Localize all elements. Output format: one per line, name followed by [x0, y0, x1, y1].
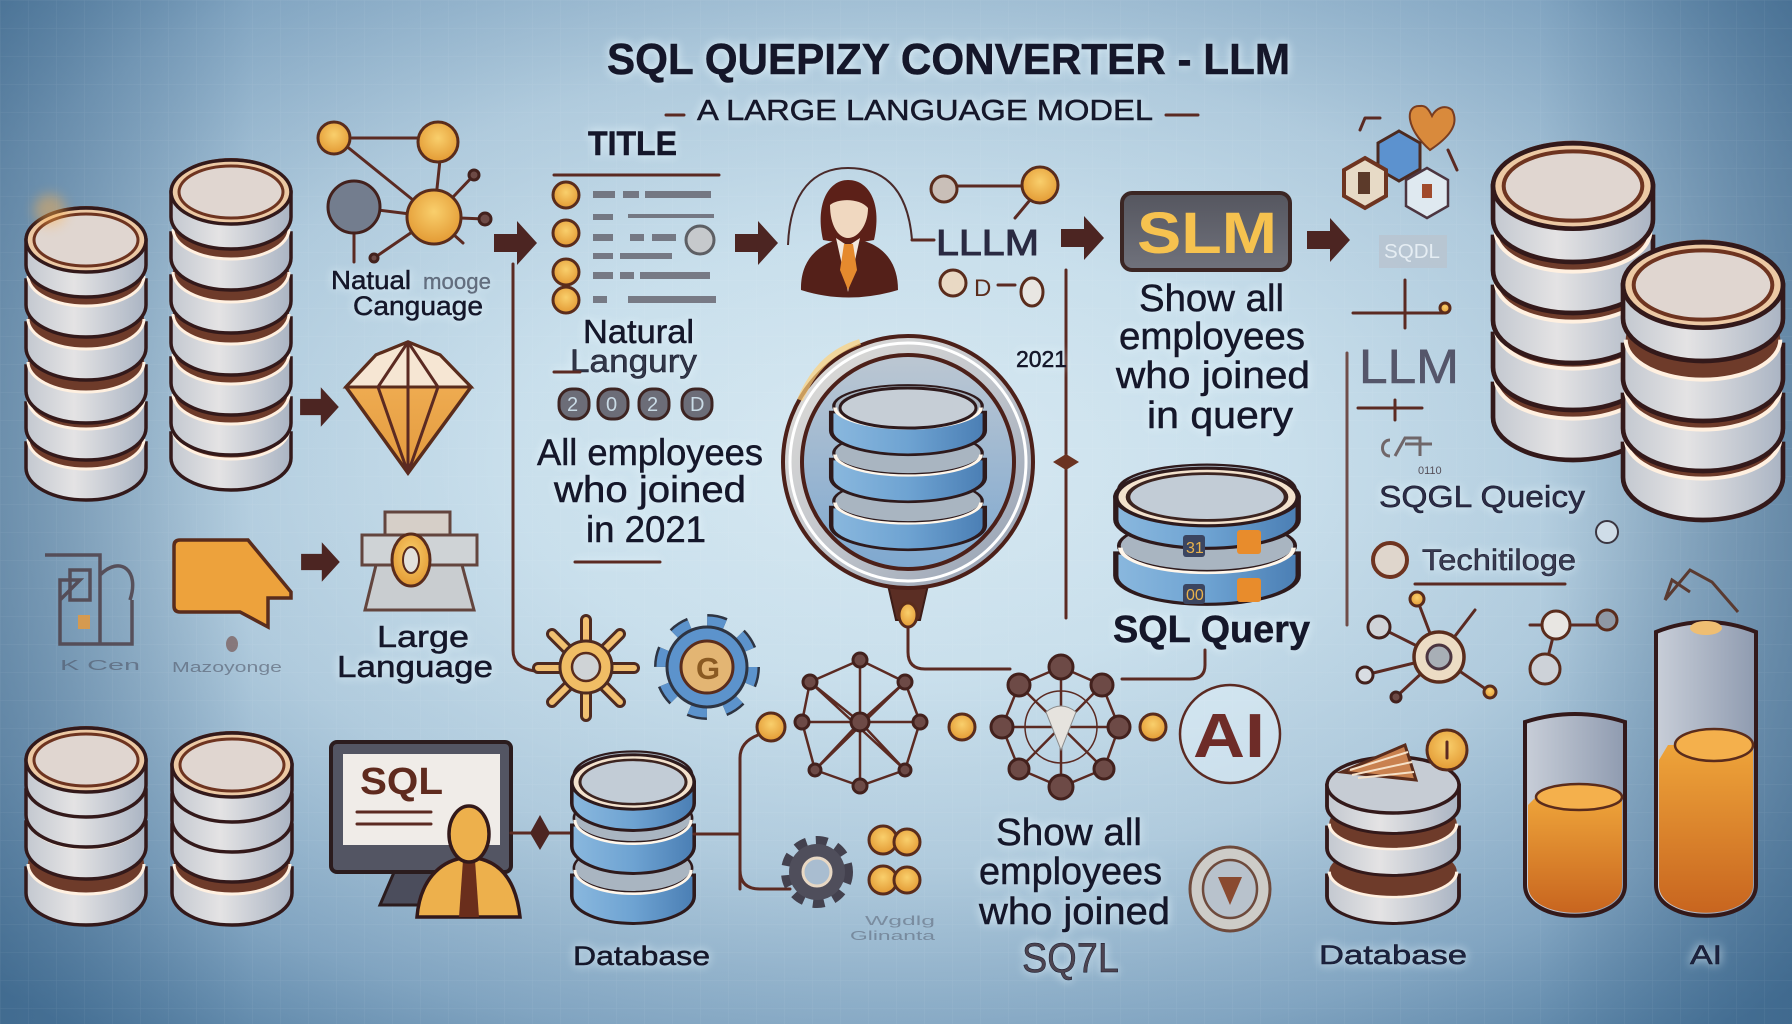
- year label: 2021: [1016, 346, 1067, 372]
- database stack bottom left 1: [26, 726, 146, 925]
- connector from SQL query: [1122, 650, 1205, 679]
- year pills: D: [690, 394, 704, 416]
- monitor with SQL: [331, 742, 511, 905]
- query text left: All employees: [537, 432, 763, 473]
- person orange: [417, 806, 520, 917]
- magnifier stack: [831, 385, 985, 550]
- database stack bottom left 2: [172, 731, 292, 925]
- natural language text: [554, 313, 697, 379]
- query text left: who joined: [553, 469, 746, 510]
- connector vertical right: [1346, 353, 1348, 625]
- connector vertical middle: [1053, 270, 1079, 618]
- query text left: in 2021: [586, 509, 706, 550]
- year pills: 2: [567, 394, 578, 416]
- faded caption bottom: [850, 913, 936, 943]
- faded SQL chip: [1379, 235, 1447, 268]
- SQL cylinder: 00: [1186, 587, 1204, 604]
- network icon top left: [318, 122, 491, 262]
- arrow to SLM: [1061, 216, 1104, 260]
- AI circle: [1180, 685, 1280, 783]
- icon row below LLLM: [940, 270, 1043, 306]
- natural language text: Langury: [570, 343, 697, 379]
- SQGL query label: SQGL Queicy: [1379, 479, 1586, 514]
- title: SQL QUEPIZY CONVERTER - LLM: [607, 35, 1290, 84]
- technology label: Techitiloge: [1422, 544, 1576, 577]
- faded caption bottom: Wgdlg: [865, 913, 935, 928]
- arrow after SLM: [1307, 218, 1350, 262]
- query text bottom: [978, 812, 1170, 981]
- arrow to list: [494, 221, 537, 265]
- icon: sun gear: [538, 620, 634, 716]
- LLM text right: LLM: [1359, 341, 1459, 394]
- label natural language: [331, 265, 491, 321]
- icon: diamond: [346, 342, 471, 473]
- database stack front right: [1623, 240, 1783, 520]
- label large language: Large: [377, 619, 469, 654]
- coins near gear: [869, 826, 920, 894]
- database stack second left: [171, 158, 291, 490]
- connector tree: [694, 735, 790, 889]
- title small: TITLE: [588, 125, 677, 163]
- label large language: [337, 619, 493, 684]
- database stack far right: [1493, 141, 1653, 460]
- natural language text: Natural: [583, 313, 694, 350]
- faded caption: K Cen: [60, 657, 140, 674]
- LLLM text: LLLM: [936, 222, 1039, 263]
- faded caption bottom: Glinanta: [850, 928, 936, 943]
- year pills: [559, 389, 712, 419]
- AI circle: AI: [1193, 702, 1265, 771]
- sphere network: [795, 653, 927, 793]
- label large language: Language: [337, 649, 493, 684]
- subtitle: A LARGE LANGUAGE MODEL: [697, 95, 1153, 127]
- connector from magnifier: [908, 627, 1010, 669]
- small axis marker: [1353, 280, 1450, 328]
- SQL query label: SQL Query: [1113, 609, 1310, 651]
- list coins: [553, 182, 579, 313]
- query text bottom: Show all: [996, 812, 1142, 854]
- hex icons top right: [1344, 106, 1457, 218]
- query text right: in query: [1147, 395, 1293, 437]
- icon: speech bubble folder: [174, 540, 291, 627]
- shield badge: [1190, 847, 1270, 931]
- lock machine icon: [362, 512, 477, 610]
- arrow to person: [735, 221, 778, 265]
- query text right: Show all: [1139, 278, 1284, 320]
- faded SQL chip: SQDL: [1384, 241, 1440, 263]
- monitor with SQL: SQL: [360, 761, 443, 803]
- faded caption: Mazoyonge: [172, 659, 282, 676]
- central hub network: [991, 655, 1130, 799]
- bar cylinder tall: [1656, 621, 1756, 916]
- small pen icon on bar: [1665, 570, 1738, 612]
- year pills: 2: [647, 394, 658, 416]
- query text bottom: who joined: [978, 891, 1170, 933]
- database stack far left: [26, 194, 146, 500]
- icon: blue gear: G: [696, 651, 720, 686]
- technology label: [1373, 521, 1618, 584]
- label AI: AI: [1690, 940, 1722, 970]
- SQL cylinder: [1116, 465, 1298, 604]
- list panel: [553, 175, 719, 313]
- query text bottom: SQ7L: [1022, 934, 1119, 981]
- list grey badge: [686, 226, 714, 254]
- query text bottom: employees: [979, 851, 1162, 893]
- faded caption: [60, 636, 282, 676]
- arrow to large language: [301, 542, 340, 582]
- year pills: 0: [606, 394, 617, 416]
- SLM badge: [1122, 193, 1290, 270]
- icon: blue gear: [663, 623, 751, 711]
- label database center: Database: [573, 941, 710, 971]
- small widget right: 0110: [1418, 465, 1442, 477]
- query text right: who joined: [1115, 355, 1310, 397]
- label database right: Database: [1319, 940, 1467, 970]
- icon row below LLLM: D: [974, 275, 991, 302]
- SLM badge: SLM: [1137, 201, 1277, 266]
- bar cylinder short: [1525, 714, 1625, 916]
- query text right: employees: [1119, 316, 1305, 358]
- magnifier with database: [783, 336, 1033, 627]
- list text lines: [593, 191, 716, 303]
- label natural language: Canguage: [353, 291, 483, 321]
- coin node: [757, 713, 785, 741]
- coin between networks: [949, 714, 975, 740]
- icon row above LLLM: [931, 167, 1058, 218]
- connector vertical left: [513, 264, 535, 671]
- person icon: [788, 168, 912, 298]
- small widget right: [1358, 400, 1442, 477]
- coin before AI: [1140, 714, 1166, 740]
- arrow to diamond: [300, 387, 339, 427]
- label natural language: Natual: [331, 265, 411, 295]
- network icon right: [1357, 592, 1617, 702]
- database with fan bottom right: [1327, 730, 1467, 923]
- database bottom center: [572, 751, 694, 923]
- connector monitor to database: [511, 815, 571, 850]
- label natural language: mooge: [423, 269, 491, 294]
- SQL cylinder: 31: [1186, 540, 1204, 557]
- gear dark: [787, 842, 847, 902]
- query text left: [537, 432, 763, 562]
- sketch icon left: [45, 555, 133, 644]
- query text right: [1115, 278, 1310, 437]
